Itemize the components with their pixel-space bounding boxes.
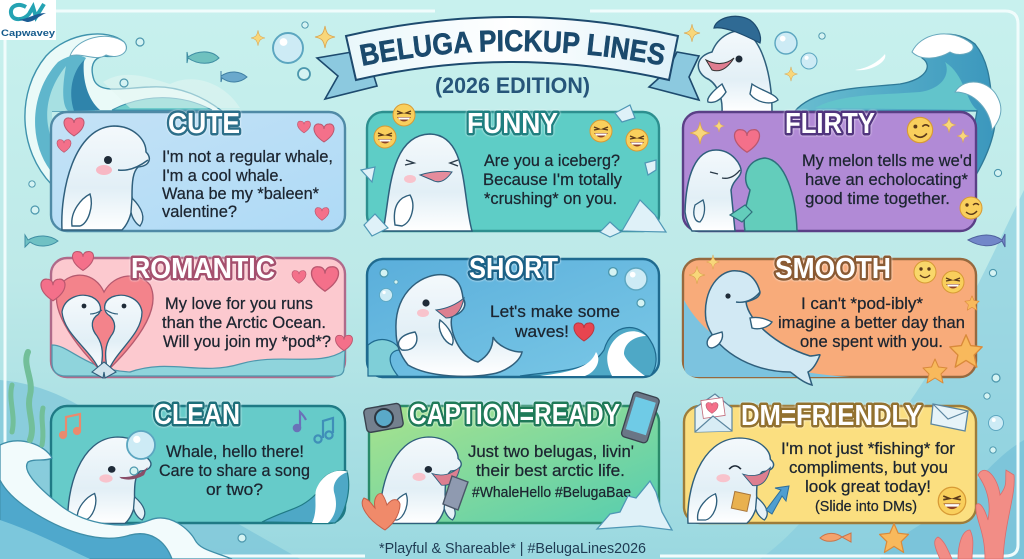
icon: small phone held [443, 476, 468, 510]
heading: funny: FUNNY [467, 108, 558, 140]
mascot beluga with cap [698, 16, 778, 112]
text: clean [159, 442, 310, 499]
text: dm-friendly: (Slide into DMs) [815, 498, 917, 515]
panel: cute [51, 108, 345, 231]
text: cute line: valentine? [162, 202, 237, 221]
text: short: Let's make some [490, 302, 620, 321]
text: romantic: Will you join my *pod*? [163, 332, 331, 351]
text: cute line [162, 147, 333, 221]
heart with two belugas [56, 275, 153, 378]
text: dm-friendly: I'm not just *fishing* for [781, 439, 955, 458]
panel: dm-friendly [684, 394, 976, 523]
text: caption [468, 442, 634, 501]
beluga: cute [62, 126, 149, 230]
swoosh: smooth water [684, 300, 850, 377]
text: cute line: I'm a cool whale. [162, 166, 283, 185]
text: flirty [802, 151, 972, 208]
title text: BELUGA PICKUP LINES [360, 30, 665, 66]
text: short: waves! [514, 322, 569, 341]
heading: smooth: SMOOTH [775, 253, 891, 285]
title ribbon [315, 16, 700, 102]
hearts: romantic [41, 251, 353, 351]
icon: smartphone [621, 391, 660, 444]
panel: flirty [683, 108, 982, 231]
seaweed: left [11, 352, 43, 445]
text: smooth: one spent with you. [800, 332, 943, 351]
icon: closed envelope [931, 404, 968, 431]
text: flirty: have an echolocating* [805, 170, 968, 189]
bubbles: short [380, 268, 647, 307]
belugas: flirty pair [685, 150, 797, 231]
text: flirty: My melon tells me we'd [802, 151, 972, 170]
heading: dm-friendly: DM=FRIENDLY [741, 400, 922, 432]
top-right wave [795, 34, 1001, 196]
icons: smiles, sparkles and starfish [689, 255, 982, 383]
icon: card and arrow [731, 486, 789, 514]
iceberg: caption [597, 481, 672, 530]
text: cute line: I'm not a regular whale, [162, 147, 333, 166]
logo: Capwavey: Capwavey [1, 28, 56, 39]
icon: red heart [574, 323, 594, 341]
text: funny: *crushing* on you. [484, 189, 617, 208]
beluga: smooth [705, 271, 820, 385]
heading: flirty: FLIRTY [785, 108, 875, 140]
text: funny: Are you a iceberg? [484, 151, 620, 170]
ice chunks: funny [361, 105, 666, 237]
text: smooth: imagine a better day than [778, 313, 965, 332]
panel: funny [361, 104, 666, 237]
logo: Capwavey [0, 0, 56, 40]
hearts: cute [57, 118, 334, 220]
text: dm-friendly: look great today! [805, 477, 931, 496]
text: cute line: Wana be my *baleen* [162, 184, 319, 203]
text: funny: Because I'm totally [483, 170, 622, 189]
icon: coral [362, 494, 400, 530]
text: romantic [162, 294, 331, 351]
heading: short: SHORT [469, 253, 558, 285]
panel: smooth [683, 253, 982, 385]
panel: short [367, 253, 659, 377]
text: dm-friendly [781, 439, 955, 515]
text: romantic: than the Arctic Ocean. [162, 313, 326, 332]
beluga: clean [68, 437, 151, 523]
text: clean: Whale, hello there! [166, 442, 304, 461]
heading: cute: CUTE [168, 108, 240, 140]
text: clean: Care to share a song [159, 461, 310, 480]
icons: flirty heart, sparkles and winks [690, 117, 982, 219]
icon: camera [363, 403, 404, 433]
panel: caption-ready [362, 391, 672, 530]
text: smooth [778, 294, 965, 351]
emoji: laughing faces [374, 104, 648, 151]
top-left wave [25, 34, 240, 185]
heading: romantic: ROMANTIC [131, 253, 275, 285]
coral: bottom right [935, 470, 1014, 559]
heading: clean: CLEAN [154, 399, 240, 431]
waves: romantic [52, 345, 345, 376]
heading: caption-ready: CAPTION=READY [409, 399, 620, 431]
footer: *Playful & Shareable* | #BelugaLines2026 [379, 540, 646, 557]
text: funny [483, 151, 622, 208]
beluga: short [396, 275, 522, 376]
wave: bottom left foreground [0, 441, 232, 559]
beluga: caption [380, 437, 461, 523]
panel: clean [51, 399, 349, 523]
text: flirty: good time together. [805, 189, 950, 208]
text: clean: or two? [206, 480, 263, 499]
text: caption: Just two belugas, livin' [468, 442, 634, 461]
wave: short left [368, 340, 400, 376]
beluga: dm-friendly [688, 438, 774, 523]
wave: short [520, 328, 656, 376]
panel: romantic [41, 251, 353, 378]
text: caption: their best arctic life. [476, 461, 625, 480]
text: smooth: I can't *pod-ibly* [801, 294, 923, 313]
wave: clean right [262, 471, 349, 523]
icon: open envelope with heart [695, 394, 732, 432]
text: romantic: My love for you runs [165, 294, 313, 313]
bubbles: clean [127, 431, 155, 475]
music notes [60, 412, 333, 443]
text: short [490, 302, 620, 341]
text: dm-friendly: compliments, but you [789, 458, 948, 477]
fish and starfish: bottom [238, 524, 908, 552]
emoji: crying laughing [938, 487, 966, 515]
decorations: fish, bubbles and sparkles around title [25, 22, 1005, 453]
subtitle: (2026 EDITION) [435, 73, 590, 98]
text: caption: #WhaleHello #BelugaBae [472, 484, 631, 501]
beluga: funny [383, 134, 472, 231]
